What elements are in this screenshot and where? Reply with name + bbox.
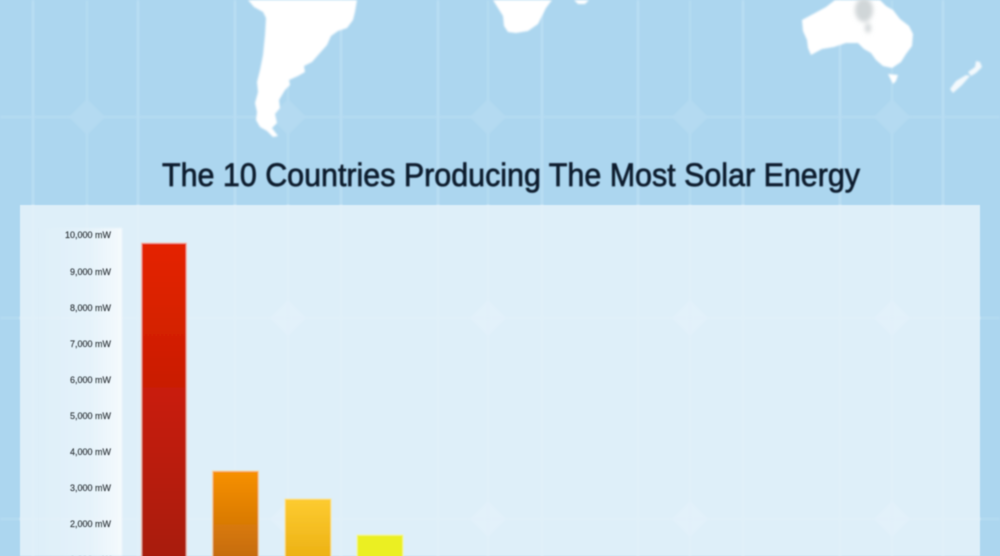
y axis labels: 7,000 mW <box>70 339 112 349</box>
y axis labels: 2,000 mW <box>70 519 112 529</box>
y axis labels: 9,000 mW <box>70 267 112 277</box>
bar: rank 1 <box>142 243 186 556</box>
bar chart <box>142 243 403 556</box>
panel: chart background <box>20 205 980 556</box>
map: Tasmania <box>888 74 898 84</box>
y axis labels: 10,000 mW <box>65 230 111 240</box>
y axis labels <box>65 230 112 556</box>
title: The 10 Countries Producing The Most Solar Energy <box>162 157 860 193</box>
bar: rank 4 <box>357 535 403 556</box>
y axis strip <box>38 228 122 556</box>
y axis labels: 3,000 mW <box>70 483 112 493</box>
map: Australia <box>802 0 913 68</box>
bar: rank 3 <box>285 499 331 556</box>
y axis labels: 4,000 mW <box>70 447 112 457</box>
map: New Zealand <box>950 61 982 93</box>
y axis labels: 5,000 mW <box>70 411 112 421</box>
world map <box>248 0 982 137</box>
map: Madagascar <box>574 0 589 4</box>
map: highlight spot over Australia <box>855 0 873 33</box>
map: Africa <box>493 0 552 33</box>
y axis labels: 6,000 mW <box>70 375 112 385</box>
map: South America <box>248 0 357 137</box>
bar: rank 2 <box>212 471 258 556</box>
y axis labels: 8,000 mW <box>70 303 112 313</box>
